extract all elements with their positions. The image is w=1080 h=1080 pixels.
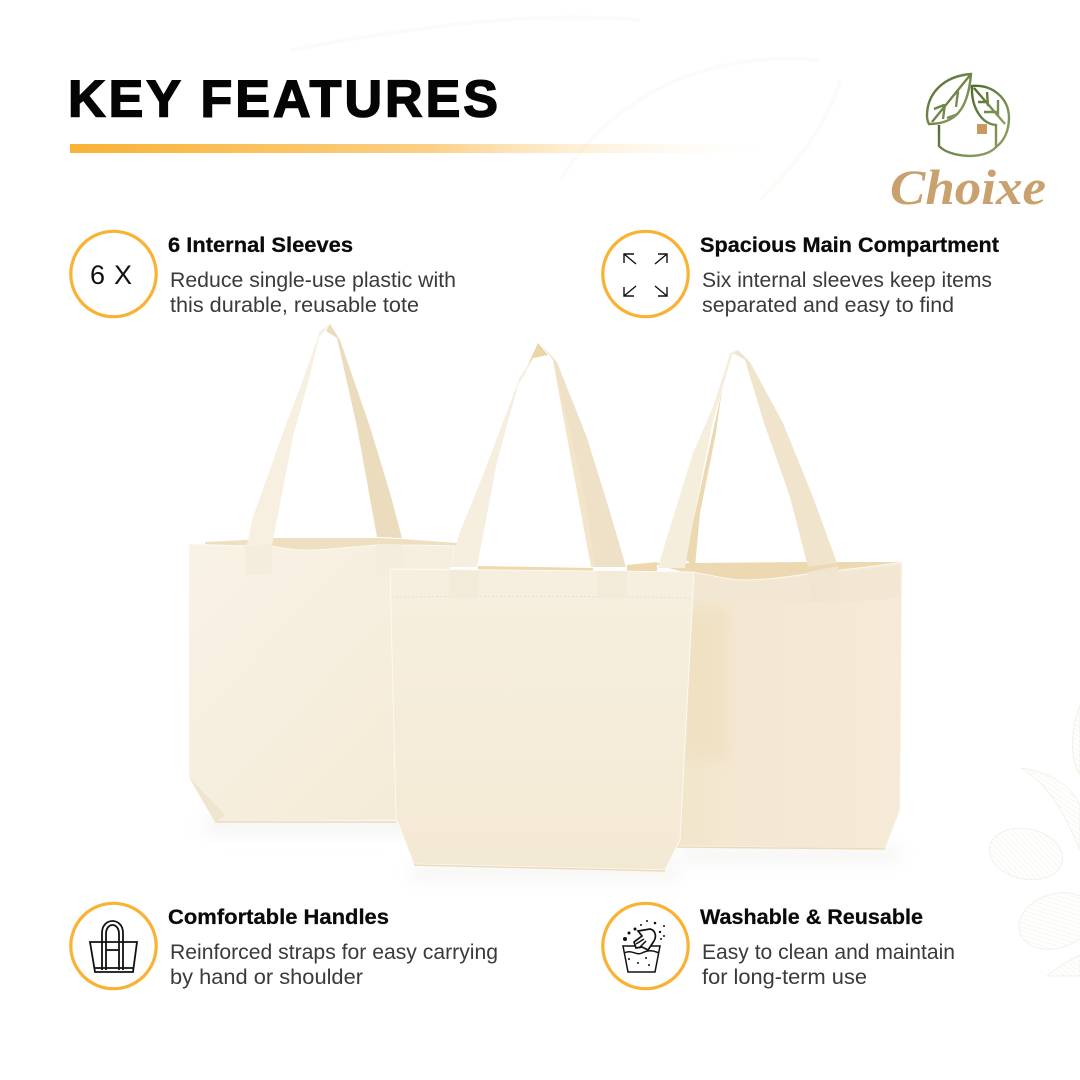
title underline <box>70 144 785 153</box>
description: by hand or shoulder <box>170 966 363 989</box>
strap inner fold <box>520 343 548 382</box>
heading: Comfortable Handles <box>168 906 389 929</box>
icon: expand arrows <box>603 231 688 317</box>
logo <box>890 74 1046 215</box>
feature: washable and reusable <box>603 903 955 989</box>
description: Reinforced straps for easy carrying <box>170 941 498 964</box>
left bag <box>189 324 457 822</box>
shadow next to centre bag <box>680 610 728 760</box>
faint top decoration <box>290 17 840 200</box>
back strap edge sliver <box>553 360 595 567</box>
logo wordmark: Choixe <box>890 159 1046 215</box>
heading: Washable & Reusable <box>700 906 923 929</box>
back strap <box>540 343 626 567</box>
rim band <box>391 570 693 598</box>
description: for long-term use <box>702 966 867 989</box>
description <box>702 269 992 317</box>
back strap <box>326 324 402 538</box>
body <box>677 562 902 849</box>
feature: spacious main compartment <box>603 231 999 317</box>
heading: Spacious Main Compartment <box>700 234 999 257</box>
rim band <box>690 566 900 603</box>
front strap <box>247 324 330 545</box>
front strap <box>450 358 533 567</box>
corner fold <box>189 777 225 822</box>
bag interior <box>650 562 902 582</box>
strap patches <box>245 545 403 575</box>
back strap <box>733 350 837 567</box>
body <box>189 544 455 822</box>
front strap <box>658 350 738 568</box>
description <box>702 941 955 989</box>
body <box>390 569 694 870</box>
logo emblem <box>927 74 1009 156</box>
description: Reduce single-use plastic with <box>170 269 456 292</box>
description: separated and easy to find <box>702 294 954 317</box>
middle bag <box>390 343 694 871</box>
bottom edge <box>215 821 396 823</box>
product photo: three canvas tote bags <box>189 324 902 876</box>
description: this durable, reusable tote <box>170 294 419 317</box>
bag interior <box>205 538 457 562</box>
logo window <box>977 124 987 134</box>
right bag <box>650 350 902 849</box>
description: Easy to clean and maintain <box>702 941 955 964</box>
bottom edge <box>414 865 665 871</box>
bottom edge <box>677 847 885 849</box>
faint background leaf decoration <box>985 705 1080 976</box>
description <box>170 941 498 989</box>
description <box>170 269 456 317</box>
description: Six internal sleeves keep items <box>702 269 992 292</box>
icon: washing bowl with hand <box>603 903 688 989</box>
feature: 6 internal sleeves <box>71 231 456 317</box>
icon: tote bag <box>71 903 156 989</box>
ground shadows <box>205 820 900 876</box>
strap patch <box>808 566 840 602</box>
heading: 6 Internal Sleeves <box>168 234 353 257</box>
feature: comfortable handles <box>71 903 498 989</box>
bag interior <box>478 555 657 572</box>
title: KEY FEATURES <box>68 70 501 128</box>
inner sliver <box>686 390 722 567</box>
strap patches <box>449 570 627 598</box>
icon: 6 X badge <box>71 231 156 317</box>
icon: 6 X badge: 6 X <box>90 260 132 290</box>
